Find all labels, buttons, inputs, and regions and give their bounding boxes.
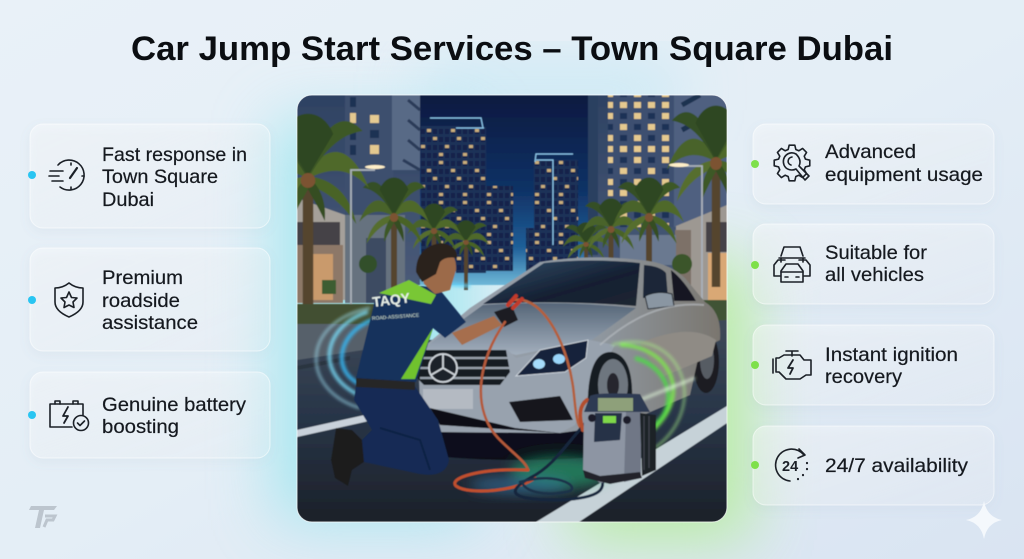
text: availability: 24/7 availability [825,455,968,477]
technician: ROAD-ASSISTANCE [372,313,420,322]
cyan energy swirl [316,284,470,408]
text: roadside assistance [102,267,198,334]
technician [331,243,518,486]
mirror [645,292,674,309]
star emblem [429,354,457,382]
floor glow [510,456,610,488]
left storefronts [297,198,405,303]
text: all vehicles: Suitable for [825,242,928,264]
car shadow [442,430,584,460]
head [422,256,457,294]
text: advanced equipment [825,141,983,186]
card: fast response [28,124,270,228]
card: roadside assistance [28,248,270,351]
icon: gear wrench [774,145,810,181]
text: advanced equipment: equipment usage [825,164,983,186]
green side panel [401,328,433,379]
front wheel [587,352,633,400]
palms [297,105,727,305]
panel: right benefits [751,124,994,505]
text: fast response: Dubai [102,189,154,211]
icon: engine [773,351,811,379]
front fascia [418,340,615,433]
text: ignition recovery [825,344,958,388]
right storefronts [620,205,727,305]
forearm [452,316,502,345]
text: ignition recovery: recovery [825,366,902,388]
shirt logo: TAQY [371,289,412,310]
lower vent [509,396,573,422]
hedge and sidewalk [297,300,727,362]
car body side [420,257,720,433]
road [297,320,727,522]
title: Car Jump Start Services – Town Square Dubai [131,30,893,68]
card: availability [751,426,994,505]
icon: battery check [50,401,88,430]
logo mark [29,506,57,528]
windshield [483,260,640,306]
text: all vehicles [825,242,928,286]
card: advanced equipment [751,124,994,204]
text: ignition recovery: Instant ignition [825,344,958,366]
text: roadside assistance: assistance [102,312,198,334]
green energy swirl [612,342,695,448]
hood [425,303,636,355]
panel: left benefits [28,124,270,458]
text: fast response: Town Square [102,166,218,188]
sparkle [966,501,1002,539]
headlight [516,340,588,376]
towers [421,118,578,273]
boot [331,428,364,486]
trousers [354,385,449,475]
icon: shield star [55,283,83,317]
street lamps [351,163,702,305]
icon: cars [774,247,810,282]
torso [356,286,466,382]
text: roadside assistance: roadside [102,290,180,312]
glove [494,306,518,327]
text: battery boosting: boosting [102,416,179,438]
belt [356,376,415,390]
plate [423,389,473,409]
text: battery boosting [102,394,246,438]
grille [417,350,510,385]
text: battery boosting: Genuine battery [102,394,246,416]
text: roadside assistance: Premium [102,267,183,289]
icon: 24 hour clock [776,449,807,481]
green yoke [379,280,436,304]
card: all vehicles [751,224,994,304]
text: advanced equipment: Advanced [825,141,916,163]
text: fast response: Fast response in [102,144,247,166]
car [385,257,720,460]
sky [419,95,589,286]
left and right buildings [297,95,727,285]
icon: speedometer [49,160,84,190]
text: all vehicles: all vehicles [825,264,924,286]
icon: 24 hour clock: 24 [782,459,798,475]
jumper cables [455,296,603,500]
photo: technician jump starting car at night [297,95,727,522]
side windows [643,265,668,298]
rear wheel [694,342,720,394]
card: ignition recovery [751,325,994,405]
photo border [297,95,727,522]
text: fast response [102,144,247,211]
portable jump starter [583,393,656,484]
hair [416,243,457,282]
card: battery boosting [28,372,270,458]
